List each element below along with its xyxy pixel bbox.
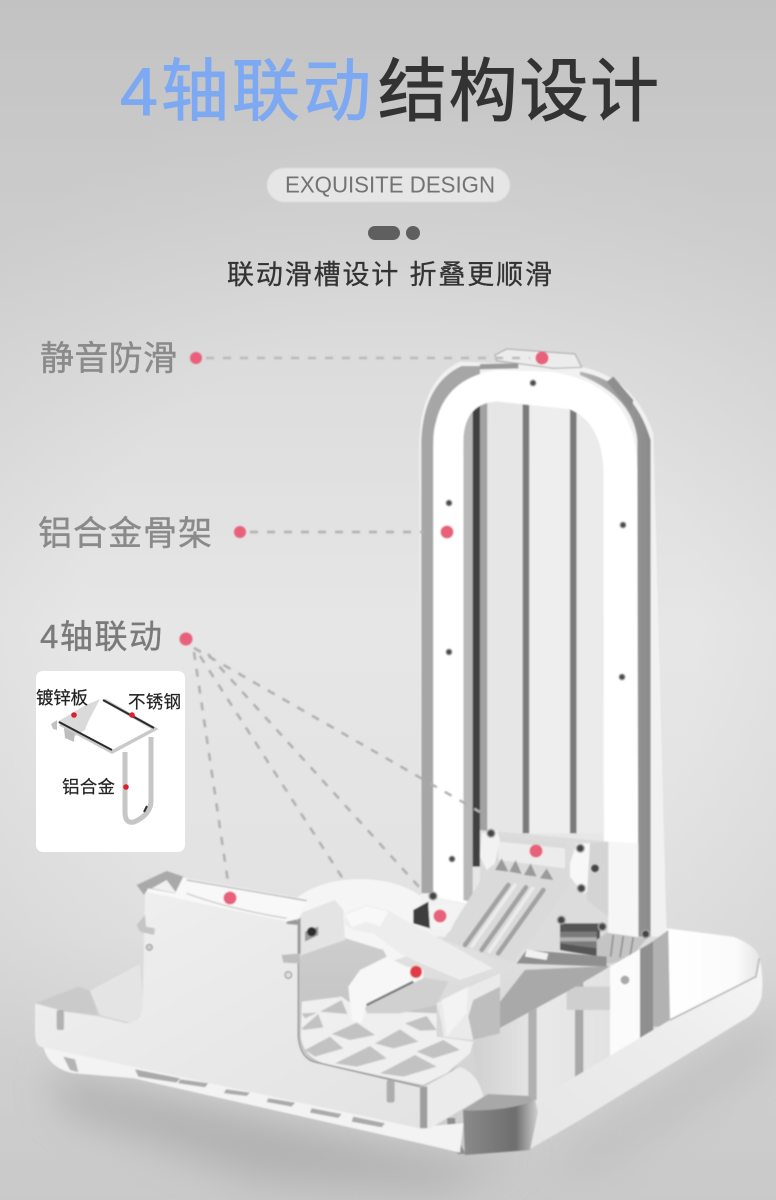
material label: 不锈钢: 不锈钢 bbox=[128, 692, 181, 712]
subheading: 联动滑槽设计 折叠更顺滑 bbox=[227, 260, 552, 290]
hotspot dots bbox=[180, 352, 548, 978]
title: 结构设计 bbox=[378, 53, 659, 130]
dark rounded foot under base bbox=[447, 1094, 538, 1155]
label: 4轴联动: 4轴联动 bbox=[40, 618, 162, 655]
label: 铝合金骨架: 铝合金骨架 bbox=[38, 515, 212, 553]
indicator dots bbox=[368, 226, 420, 240]
subtitle pill: EXQUISITE DESIGN bbox=[267, 168, 510, 202]
tray grid and link bbox=[297, 900, 500, 1087]
title bbox=[120, 53, 659, 130]
label: 静音防滑: 静音防滑 bbox=[40, 340, 177, 378]
drawer front panel bbox=[35, 871, 485, 1153]
cover block bbox=[437, 973, 500, 1040]
end cap bbox=[420, 1067, 483, 1128]
dark interior behind base wall bbox=[470, 966, 610, 1040]
bracket bbox=[297, 900, 345, 955]
card: 4-axis linkage materials bbox=[36, 671, 185, 852]
icon: metal frame bbox=[51, 699, 155, 822]
sliding link bbox=[348, 957, 423, 1023]
floor shadow bbox=[50, 1000, 776, 1190]
material label: 镀锌板: 镀锌板 bbox=[36, 688, 88, 708]
upright frame bbox=[419, 349, 667, 937]
hinge bar bbox=[137, 872, 307, 922]
product: rack on base bbox=[35, 349, 762, 1155]
back disc bbox=[284, 879, 436, 965]
center hinge bbox=[413, 829, 650, 967]
dashed leaders bbox=[194, 358, 530, 888]
base tray bbox=[528, 928, 762, 1150]
glossy wall of base bbox=[496, 930, 670, 1102]
arm bbox=[345, 905, 493, 980]
subtitle pill: EXQUISITE DESIGN: EXQUISITE DESIGN bbox=[285, 172, 495, 198]
top clip bbox=[495, 349, 582, 368]
screws bbox=[446, 380, 627, 891]
title: 4轴联动 bbox=[120, 54, 371, 130]
material label: 铝合金: 铝合金 bbox=[62, 777, 115, 797]
